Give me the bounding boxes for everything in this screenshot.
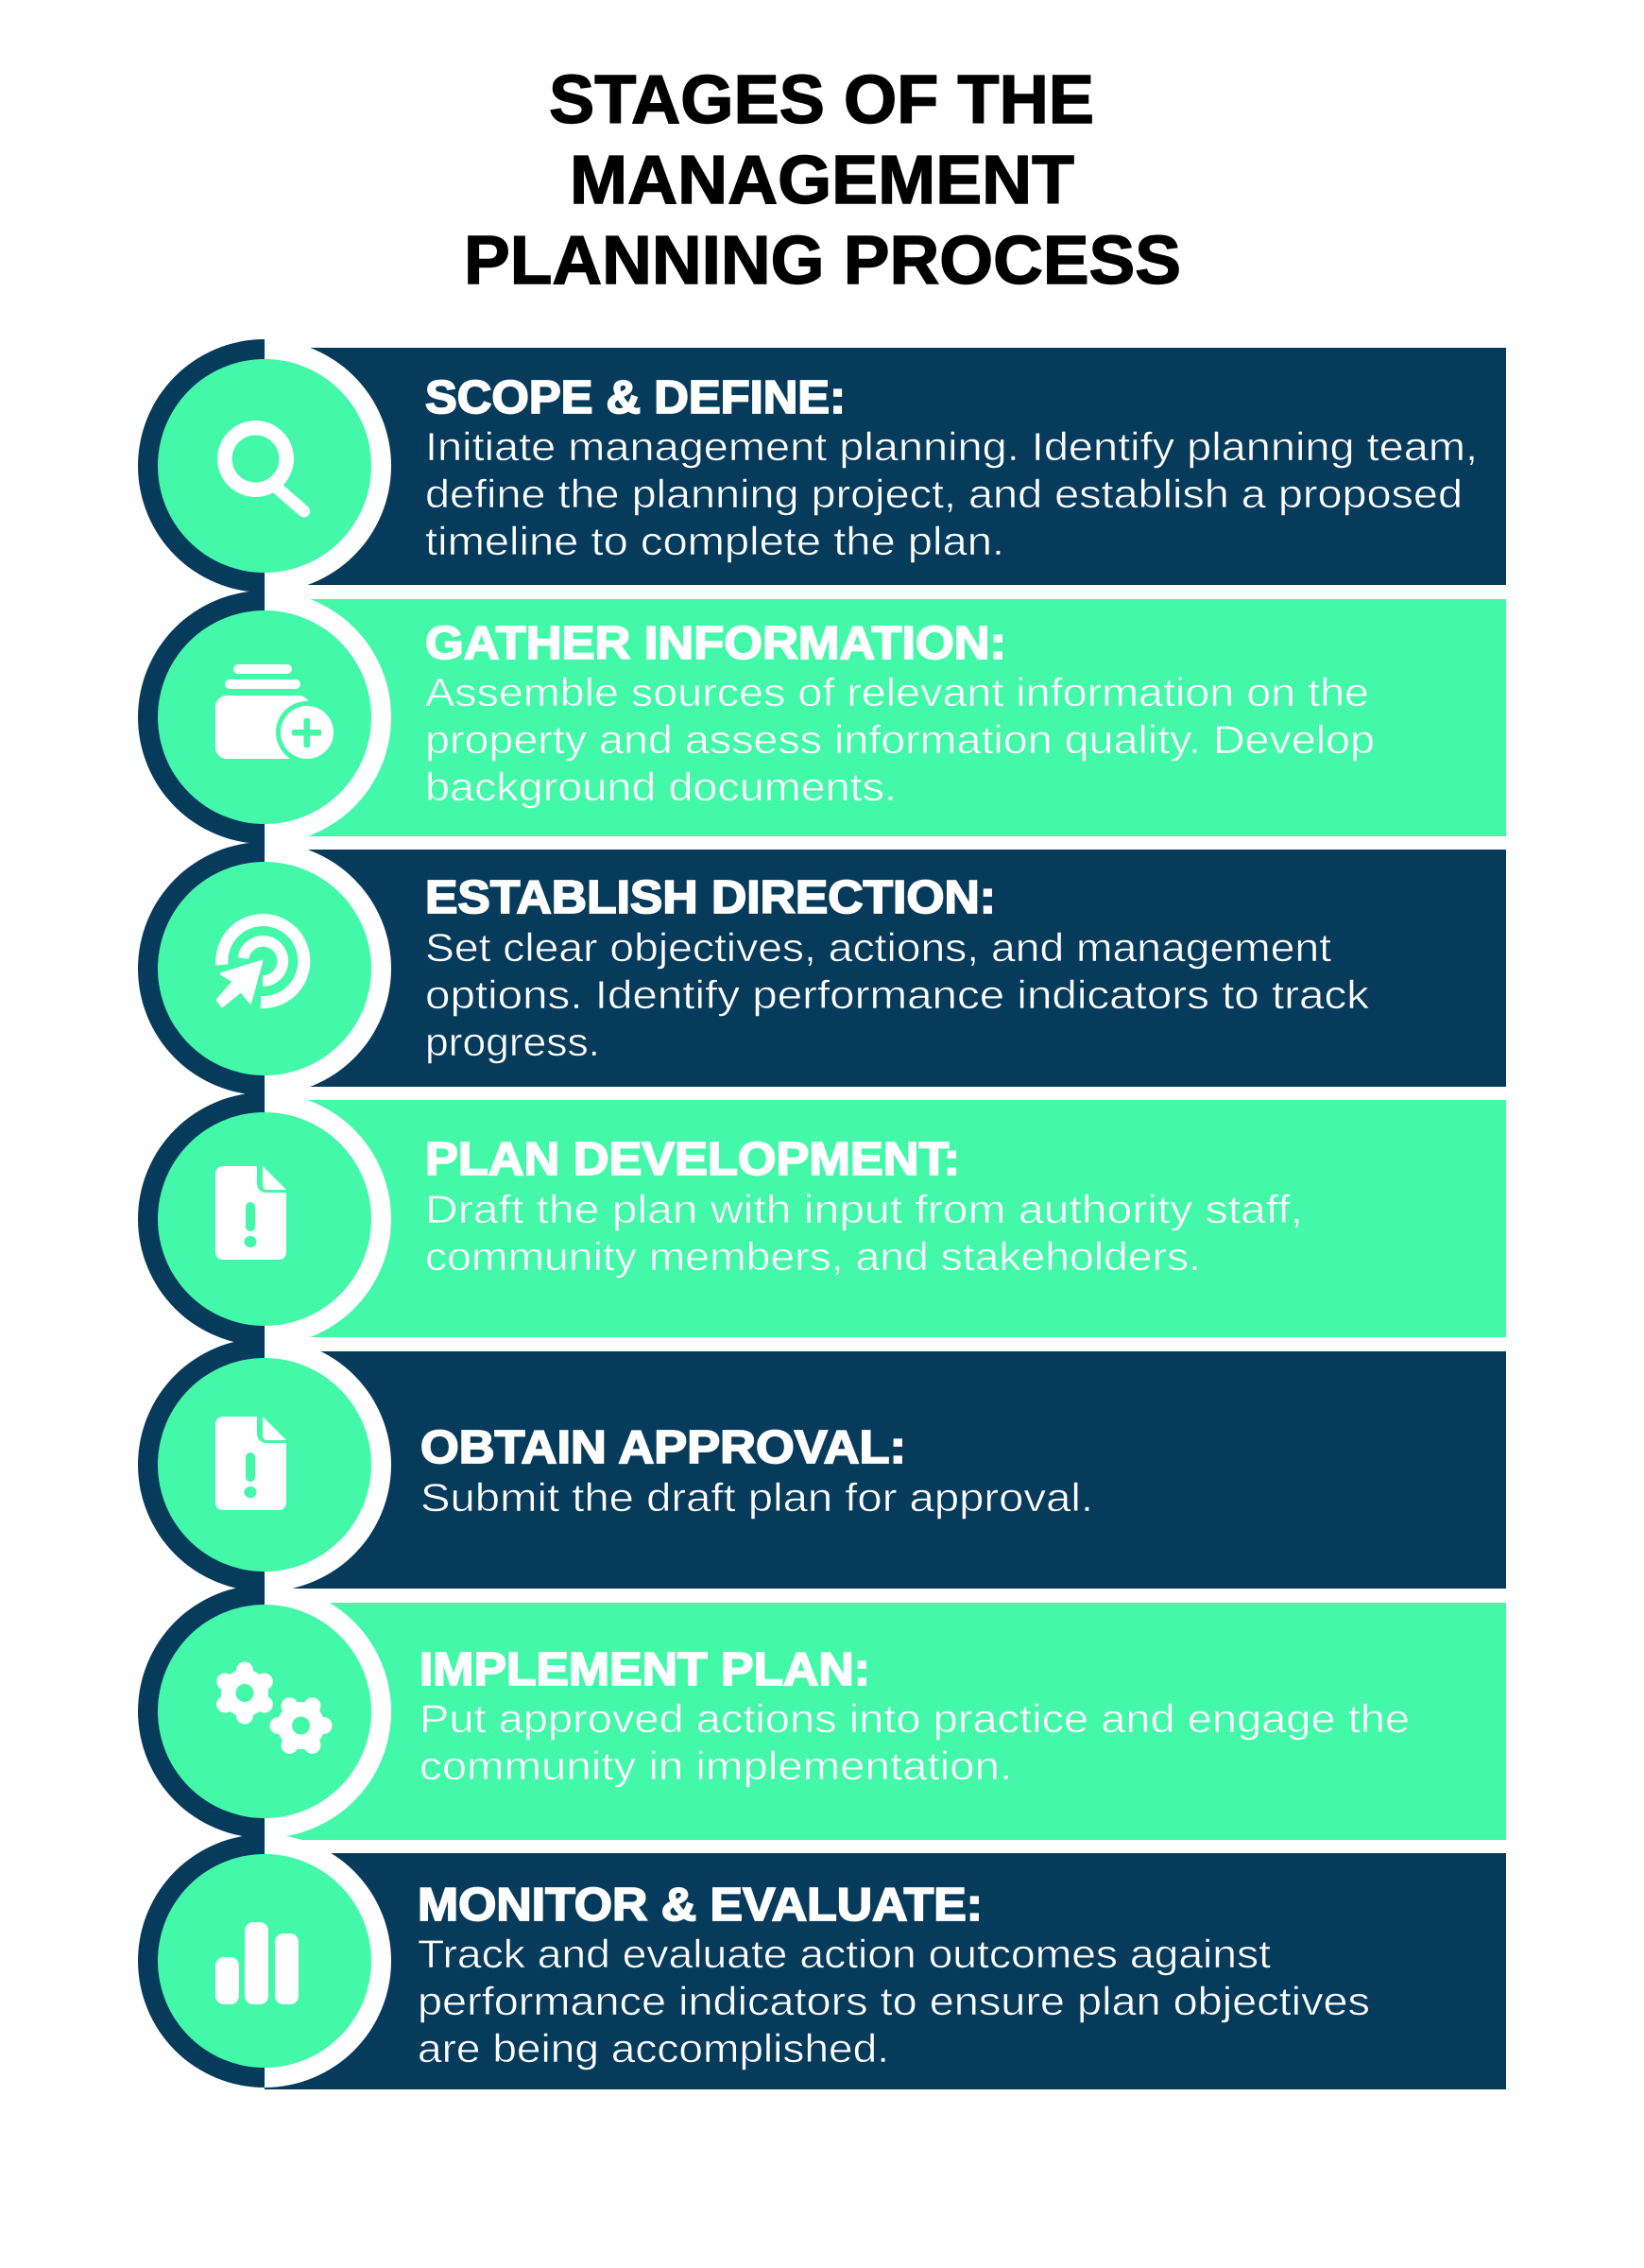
body text: Submit the draft plan for approval.	[420, 1475, 1093, 1520]
body text: Assemble sources of relevant information on the	[425, 670, 1369, 714]
title: MANAGEMENT	[570, 143, 1074, 218]
bar	[265, 348, 1506, 585]
heading: ESTABLISH DIRECTION:	[425, 872, 996, 923]
navy half ring	[138, 1338, 265, 1591]
icon: document with exclamation	[215, 1417, 286, 1510]
green circle	[158, 359, 371, 573]
icon: document with exclamation	[215, 1166, 286, 1260]
panel: establish direction	[138, 842, 1506, 1095]
body text	[425, 925, 1370, 1064]
body text	[425, 424, 1478, 563]
navy half ring	[138, 591, 265, 844]
icon: folder with plus	[215, 664, 338, 764]
bar	[265, 1100, 1506, 1337]
body text: Put approved actions into practice and engage the	[420, 1696, 1410, 1741]
body text: are being accomplished.	[418, 2026, 889, 2070]
body text: performance indicators to ensure plan objectives	[418, 1979, 1370, 2023]
white half ring	[265, 339, 391, 593]
panel: obtain approval	[138, 1338, 1506, 1591]
panel: implement plan	[138, 1585, 1506, 1840]
bar	[265, 850, 1506, 1087]
white half ring	[265, 1092, 391, 1346]
title	[464, 62, 1181, 299]
white half ring	[265, 842, 391, 1095]
bar	[265, 599, 1506, 836]
icon: magnifying glass	[225, 428, 306, 511]
green circle	[158, 1358, 371, 1572]
icon: gears	[221, 1669, 325, 1749]
bar	[265, 1351, 1506, 1589]
white half ring	[265, 1834, 391, 2088]
body text	[420, 1696, 1410, 1788]
white half ring	[265, 1585, 391, 1838]
body text: community in implementation.	[420, 1744, 1012, 1788]
panel: plan development	[138, 1092, 1506, 1346]
bar	[265, 1603, 1506, 1840]
heading: IMPLEMENT PLAN:	[420, 1644, 870, 1695]
body text	[425, 1187, 1303, 1279]
body text: define the planning project, and establish a proposed	[425, 472, 1463, 516]
body text: property and assess information quality. Develop	[425, 717, 1375, 762]
navy half ring	[138, 1092, 265, 1346]
body text: background documents.	[425, 765, 897, 809]
white half ring	[265, 591, 391, 844]
heading: OBTAIN APPROVAL:	[420, 1422, 906, 1473]
green circle	[158, 1112, 371, 1326]
body text: community members, and stakeholders.	[425, 1234, 1201, 1279]
navy half ring	[138, 339, 265, 593]
navy half ring	[138, 842, 265, 1095]
body text: progress.	[425, 1020, 600, 1064]
heading: GATHER INFORMATION:	[425, 618, 1006, 669]
navy half ring	[138, 1834, 265, 2088]
body text: Track and evaluate action outcomes against	[418, 1932, 1271, 1976]
icon: bar chart	[215, 1922, 299, 2004]
heading: PLAN DEVELOPMENT:	[425, 1134, 960, 1185]
white half ring	[265, 1338, 391, 1591]
body text: Set clear objectives, actions, and management	[425, 925, 1331, 970]
body text: timeline to complete the plan.	[425, 519, 1004, 563]
green circle	[158, 1605, 371, 1818]
panel: monitor and evaluate	[138, 1834, 1506, 2089]
panel: scope and define	[138, 339, 1506, 593]
bar	[265, 1853, 1506, 2089]
panel: gather information	[138, 591, 1506, 844]
body text	[418, 1932, 1370, 2070]
navy half ring	[138, 1585, 265, 1838]
body text	[425, 670, 1375, 809]
body text: Initiate management planning. Identify planning team,	[425, 424, 1478, 469]
title: STAGES OF THE	[549, 62, 1094, 138]
body text: options. Identify performance indicators to track	[425, 972, 1370, 1017]
title: PLANNING PROCESS	[464, 223, 1181, 299]
icon: target with arrow	[217, 920, 304, 1006]
green circle	[158, 1854, 371, 2068]
body text: Draft the plan with input from authority staff,	[425, 1187, 1303, 1231]
green circle	[158, 610, 371, 824]
heading: SCOPE & DEFINE:	[425, 372, 846, 423]
heading: MONITOR & EVALUATE:	[418, 1880, 983, 1931]
green circle	[158, 862, 371, 1075]
